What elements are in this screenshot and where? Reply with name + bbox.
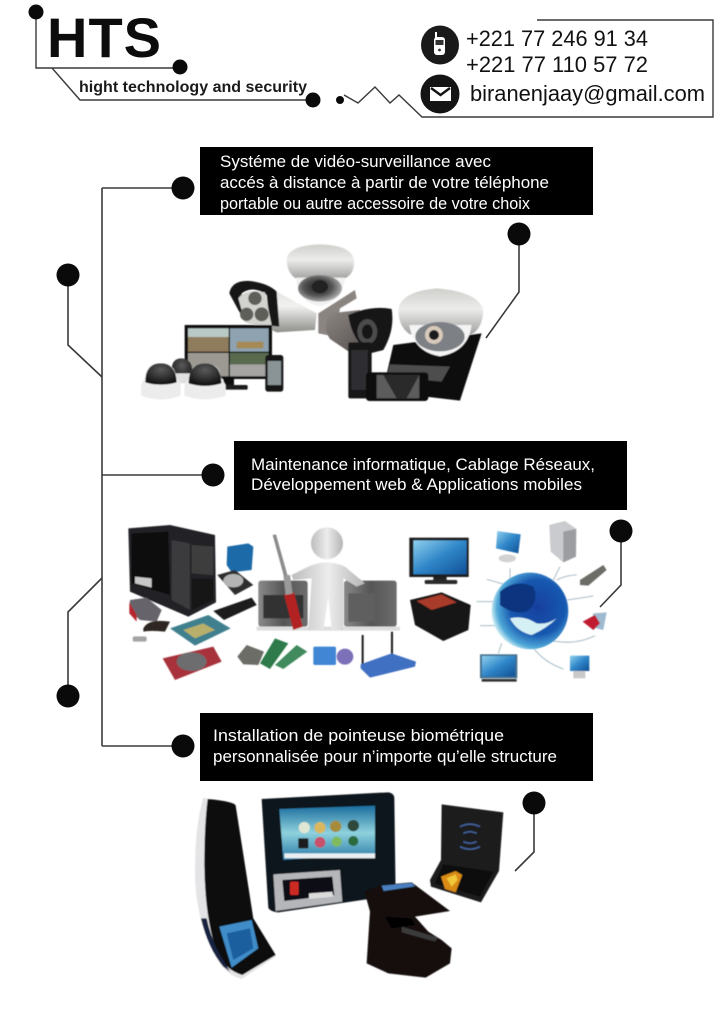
panel: video surveillance heading xyxy=(200,147,593,215)
desktop fingerprint scanner xyxy=(364,882,452,978)
proximity fingerprint reader xyxy=(430,804,503,902)
3d technician figure xyxy=(292,527,365,630)
video card xyxy=(163,647,222,680)
desktop monitor xyxy=(409,538,469,584)
hard disk xyxy=(217,570,253,595)
tall smartphone xyxy=(348,342,372,398)
graphics accessory xyxy=(213,598,257,620)
printer xyxy=(410,592,471,641)
camera mount xyxy=(318,290,357,337)
ram modules xyxy=(260,638,307,669)
image: computer hardware and technician xyxy=(128,525,416,680)
image: monitors, printer and network globe xyxy=(409,521,607,682)
blue disc box xyxy=(313,647,353,665)
bullet camera white xyxy=(229,281,317,332)
landscape smartphone xyxy=(366,372,428,401)
panel: maintenance heading xyxy=(234,441,627,510)
header contact block xyxy=(336,20,713,117)
network arrows xyxy=(477,567,595,669)
node dots xyxy=(56,176,632,814)
email address: biranenjaay@gmail.com xyxy=(470,81,705,106)
panel: biometric heading: Installation de pointeuse biométrique xyxy=(213,726,504,745)
icon: envelope xyxy=(420,74,460,114)
right dome camera xyxy=(398,288,483,356)
top dome camera xyxy=(287,244,354,306)
image: biometric terminals xyxy=(195,792,503,979)
server tower xyxy=(549,521,577,562)
panel: video surveillance heading: Systéme de vidéo-surveillance avec xyxy=(220,152,491,171)
screwdriver xyxy=(273,534,303,630)
mac pro towers xyxy=(257,581,400,631)
monitor with video feeds xyxy=(185,325,272,390)
wall terminal with touch screen xyxy=(262,792,396,912)
power supply and cables xyxy=(129,598,170,642)
panel: biometric heading xyxy=(200,713,593,781)
globe xyxy=(492,573,568,649)
logo wordmark: HTS xyxy=(47,6,162,69)
small monitor bottom xyxy=(570,656,589,678)
panel: biometric heading: personnalisée pour n’importe qu’elle structure xyxy=(213,747,557,766)
computer case xyxy=(128,525,216,617)
flat monitor xyxy=(480,654,517,682)
image: surveillance cameras and screens xyxy=(141,244,483,401)
small phone xyxy=(265,355,283,392)
three small dome cameras xyxy=(141,358,226,399)
icon: mobile phone xyxy=(421,26,459,64)
remote device xyxy=(580,565,607,586)
logo tagline: hight technology and security xyxy=(79,79,307,96)
panel: video surveillance heading: accés à distance à partir de votre téléphone xyxy=(220,173,549,192)
header logo: HTS xyxy=(28,4,320,108)
panel: maintenance heading: Maintenance informatique, Cablage Réseaux, xyxy=(251,455,595,474)
phone number one: +221 77 246 91 34 xyxy=(466,26,648,51)
red card reader xyxy=(583,612,607,630)
gray bullet camera xyxy=(326,308,392,353)
tall kiosk terminal xyxy=(195,798,276,979)
phone number two: +221 77 110 57 72 xyxy=(466,52,648,77)
blue software box xyxy=(227,543,253,572)
wifi router xyxy=(361,632,416,678)
connector tree xyxy=(68,188,621,871)
small monitor top xyxy=(496,531,521,562)
panel: maintenance heading: Développement web & Applications mobiles xyxy=(251,475,582,494)
tablet xyxy=(383,333,482,401)
cpu chip xyxy=(237,645,264,665)
panel: video surveillance heading: portable ou autre accessoire de votre choix xyxy=(220,194,530,213)
motherboard xyxy=(170,615,231,646)
